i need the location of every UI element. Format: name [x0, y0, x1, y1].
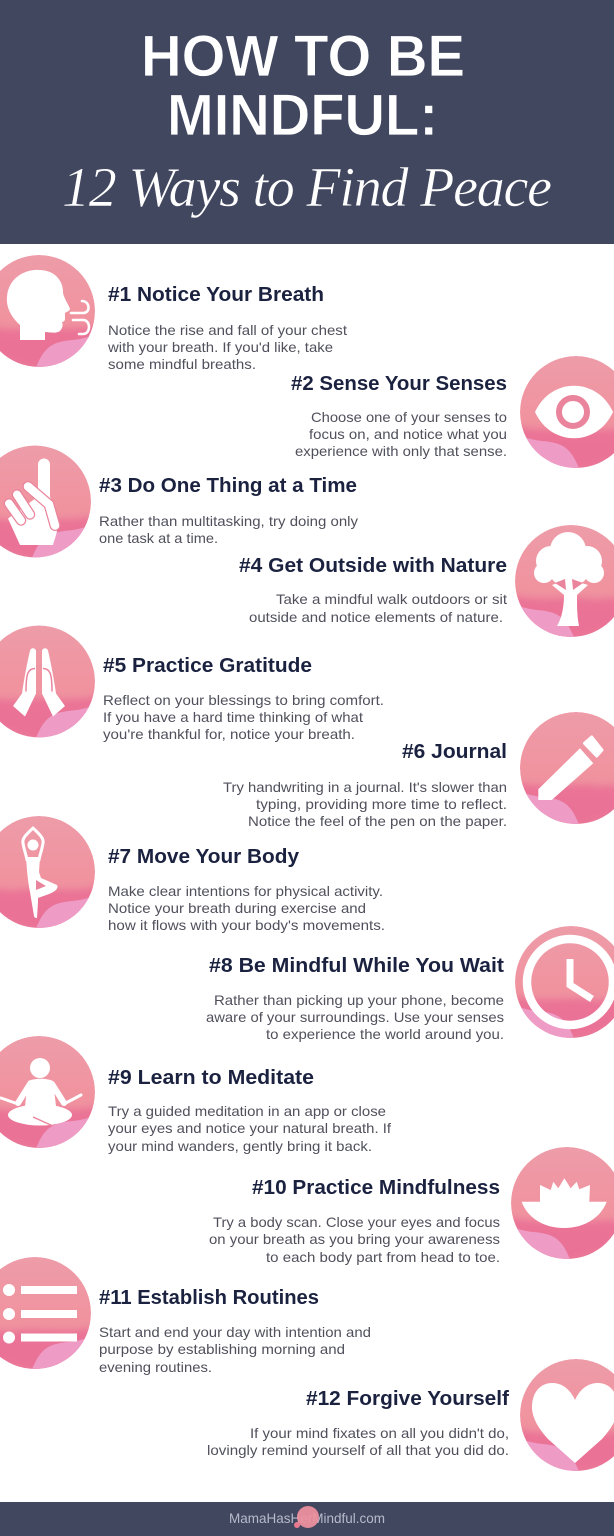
icon: eye: [516, 356, 614, 472]
icon: head breathing: [0, 255, 99, 371]
panel: step 5: If you have a hard time thinking of what: [103, 709, 363, 725]
panel: step 9: #9 Learn to Meditate: [108, 1067, 314, 1089]
panel: step 2: [291, 356, 614, 472]
panel: step 3: Rather than multitasking, try doing only: [99, 513, 358, 529]
panel: step 11: [0, 1257, 371, 1375]
icon: praying hands: [0, 626, 99, 742]
panel: step 8: Rather than picking up your phone, become: [214, 992, 504, 1008]
footer logo dot: [294, 1506, 319, 1528]
panel: step 7: Make clear intentions for physical activity.: [108, 883, 383, 899]
panel: step 7: Notice your breath during exercise and: [108, 900, 366, 916]
panel: step 5: you're thankful for, notice your breath.: [103, 726, 355, 742]
icon: one finger raised: [0, 446, 95, 562]
footer bar: [0, 1502, 614, 1536]
panel: step 4: outside and notice elements of nature.: [249, 609, 503, 625]
subtitle: 12 Ways to Find Peace: [62, 157, 552, 219]
footer website text: MamaHasHerMindful.com: [229, 1510, 385, 1526]
panel: step 5: #5 Practice Gratitude: [103, 655, 312, 677]
panel: step 7: #7 Move Your Body: [108, 846, 300, 868]
panel: step 8: to experience the world around you.: [266, 1026, 504, 1042]
icon: tree: [511, 525, 614, 641]
panel: step 12: lovingly remind yourself of all that you did do.: [207, 1442, 509, 1458]
icon: lotus: [507, 1147, 614, 1263]
panel: step 6: [223, 712, 614, 829]
panel: step 3: #3 Do One Thing at a Time: [99, 475, 357, 497]
panel: step 2: Choose one of your senses to: [311, 409, 507, 425]
panel: step 1: Notice the rise and fall of your chest: [108, 322, 347, 338]
panel: step 7: how it flows with your body's movements.: [108, 917, 385, 933]
panel: step 9: [0, 1036, 391, 1154]
panel: step 5: Reflect on your blessings to bring comfort.: [103, 692, 384, 708]
panel: step 10: #10 Practice Mindfulness: [252, 1177, 500, 1199]
icon: heart: [516, 1359, 614, 1475]
panel: step 8: [206, 926, 614, 1042]
header banner: [0, 0, 614, 244]
panel: step 10: [209, 1147, 614, 1265]
panel: step 9: your mind wanders, gently bring it back.: [108, 1138, 372, 1154]
panel: step 12: If your mind fixates on all you didn't do,: [250, 1425, 509, 1441]
panel: step 8: aware of your surroundings. Use your senses: [206, 1009, 504, 1025]
panel: step 10: Try a body scan. Close your eyes and focus: [213, 1214, 500, 1230]
panel: step 10: to each body part from head to toe.: [266, 1249, 500, 1265]
panel: step 2: experience with only that sense.: [295, 443, 507, 459]
panel: step 6: typing, providing more time to reflect.: [256, 796, 507, 812]
panel: step 12: [207, 1359, 614, 1475]
panel: step 11: #11 Establish Routines: [99, 1287, 319, 1309]
panel: step 4: Take a mindful walk outdoors or sit: [276, 591, 507, 607]
panel: step 11: purpose by establishing morning and: [99, 1341, 345, 1357]
panel: step 10: on your breath as you bring your awareness: [209, 1231, 500, 1247]
title: HOW TO BE: [141, 24, 465, 89]
panel: step 3: [0, 446, 358, 562]
title: [141, 24, 465, 148]
panel: step 4: [239, 525, 614, 641]
icon: pencil: [516, 712, 614, 828]
panel: step 12: #12 Forgive Yourself: [306, 1388, 509, 1410]
panel: step 9: Try a guided meditation in an app or close: [108, 1103, 386, 1119]
panel: step 3: one task at a time.: [99, 530, 218, 546]
panel: step 2: focus on, and notice what you: [309, 426, 507, 442]
icon: clock: [511, 926, 614, 1042]
panel: step 6: Try handwriting in a journal. It's slower than: [223, 779, 507, 795]
panel: step 7: [0, 816, 385, 933]
icon: meditating figure: [0, 1036, 99, 1152]
panel: step 2: #2 Sense Your Senses: [291, 373, 507, 395]
panel: step 11: Start and end your day with intention and: [99, 1324, 371, 1340]
panel: step 1: with your breath. If you'd like, take: [107, 339, 333, 355]
panel: step 6: #6 Journal: [402, 741, 507, 763]
icon: list: [0, 1257, 95, 1373]
panel: step 6: Notice the feel of the pen on the paper.: [248, 813, 507, 829]
panel: step 1: #1 Notice Your Breath: [108, 284, 324, 306]
panel: step 4: #4 Get Outside with Nature: [239, 555, 507, 577]
icon: yoga tree pose: [0, 816, 99, 932]
panel: step 1: some mindful breaths.: [108, 356, 256, 372]
panel: step 5: [0, 626, 384, 742]
panel: step 9: your eyes and notice your natural breath. If: [108, 1120, 391, 1136]
panel: step 8: #8 Be Mindful While You Wait: [209, 955, 504, 977]
panel: step 1: [0, 255, 347, 372]
title: MINDFUL:: [167, 83, 438, 148]
panel: step 11: evening routines.: [99, 1359, 212, 1375]
